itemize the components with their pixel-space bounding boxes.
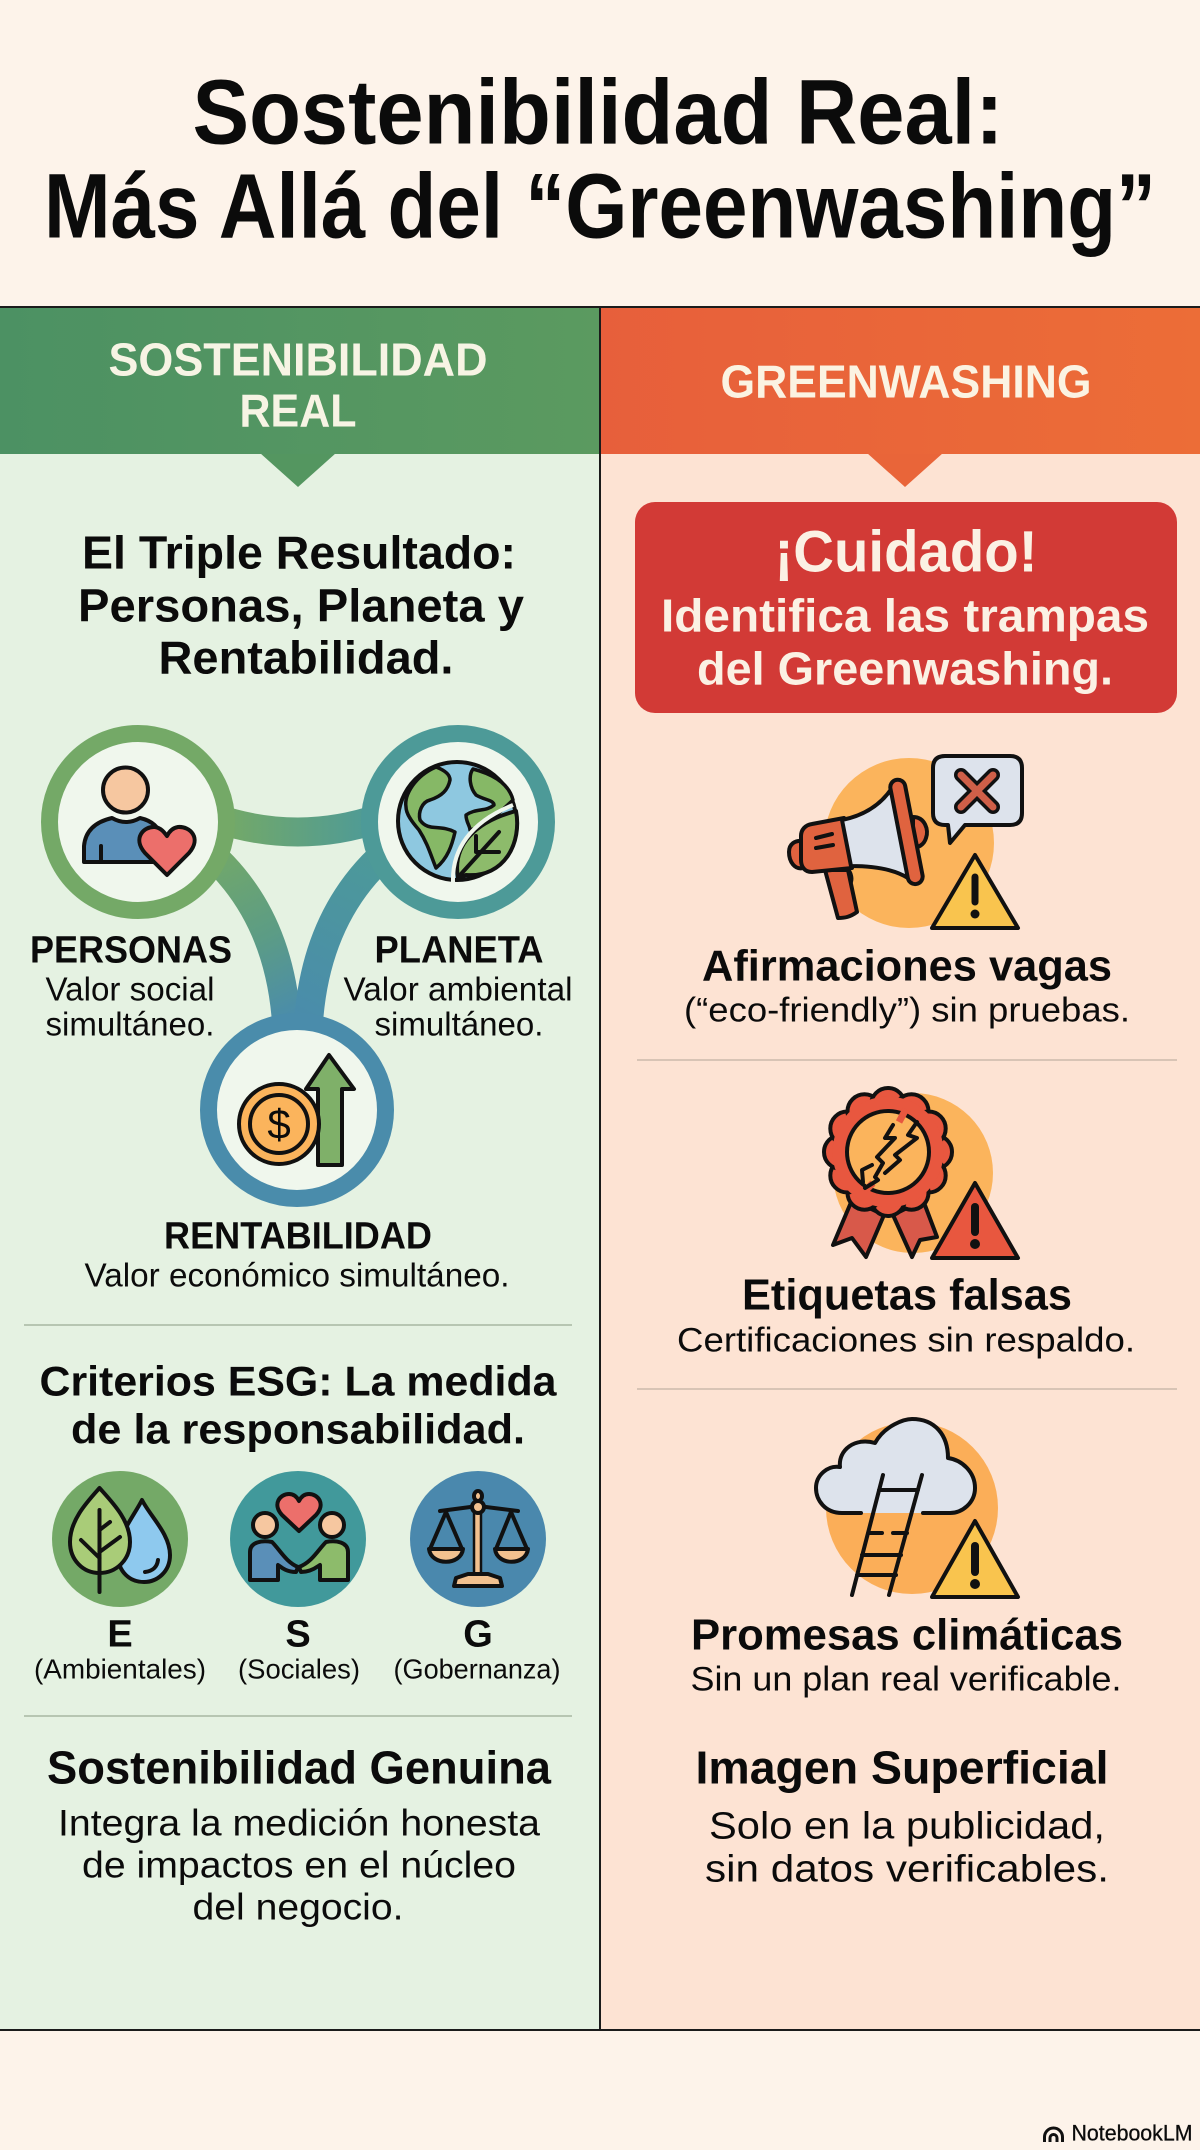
title [44,62,1156,258]
heading: criterios esg [40,1358,557,1452]
header: sostenibilidad real [0,307,600,487]
heading: criterios esg: Criterios ESG: La medida [40,1358,557,1404]
icon: cloud ladder with warning [816,1419,1018,1597]
label: rentabilidad: RENTABILIDAD [164,1216,432,1258]
text block: imagen superficial: Solo en la publicidad, [709,1806,1105,1848]
diagram: triple bottom line [30,734,572,1294]
heading: triple resultado [78,526,524,684]
esg: gobernanza: G [463,1614,493,1656]
node: planeta [370,734,546,910]
heading: triple resultado: Personas, Planeta y [78,580,524,632]
icon: false badge with warning [824,1088,1018,1258]
text block: sostenibilidad genuina: de impactos en el núcleo [82,1844,516,1886]
esg: ambientales: (Ambientales) [34,1654,206,1684]
text block: sostenibilidad genuina: del negocio. [192,1886,404,1928]
esg: gobernanza [394,1471,560,1684]
header: greenwashing [600,307,1200,487]
node: rentabilidad: $ [267,1100,291,1148]
text: promesas climaticas: Promesas climáticas [691,1610,1123,1660]
callout: cuidado: Identifica las trampas [661,590,1149,642]
esg: ambientales [34,1471,206,1684]
title: Sostenibilidad Real: [192,62,1004,164]
text: afirmaciones vagas: (“eco-friendly”) sin pruebas. [684,992,1130,1030]
esg: ambientales: E [107,1614,133,1656]
panel: greenwashing [600,307,1200,2030]
footer: notebooklm mark: NotebookLM [1072,2120,1192,2146]
icon: megaphone with warning [789,756,1022,928]
heading: criterios esg: de la responsabilidad. [71,1406,525,1452]
label: personas: simultáneo. [46,1006,214,1042]
text: etiquetas falsas [677,1270,1135,1360]
node: rentabilidad [208,1022,386,1198]
label: personas [30,930,232,1042]
callout: cuidado [635,502,1177,713]
callout: cuidado: ¡Cuidado! [774,520,1038,584]
label: rentabilidad: Valor económico simultáneo. [84,1256,510,1294]
text: afirmaciones vagas: Afirmaciones vagas [702,942,1112,990]
text: afirmaciones vagas [684,942,1130,1030]
header: greenwashing: GREENWASHING [720,356,1092,408]
heading: triple resultado: El Triple Resultado: [82,526,516,578]
text block: imagen superficial: Imagen Superficial [696,1742,1108,1794]
text: promesas climaticas: Sin un plan real verificable. [690,1660,1122,1698]
text block: imagen superficial [696,1742,1109,1890]
text block: sostenibilidad genuina: Integra la medición honesta [58,1802,540,1844]
connectors [200,818,395,1030]
text block: sostenibilidad genuina: Sostenibilidad Genuina [47,1742,551,1794]
header: sostenibilidad real: REAL [240,384,356,436]
label: planeta: Valor ambiental [344,970,572,1008]
panel: sostenibilidad real [0,307,600,2030]
panel background peach [600,307,1200,2030]
header: sostenibilidad real: SOSTENIBILIDAD [108,334,488,386]
node: personas [50,734,226,910]
label: planeta: PLANETA [374,930,544,972]
esg: gobernanza: (Gobernanza) [394,1654,560,1684]
callout: cuidado: del Greenwashing. [697,642,1113,694]
label: planeta [344,930,572,1042]
text block: imagen superficial: sin datos verificables. [705,1848,1109,1890]
heading: triple resultado: Rentabilidad. [158,632,454,684]
label: rentabilidad [84,1216,510,1294]
esg: sociales [230,1471,366,1684]
esg: sociales: S [285,1614,311,1656]
text block: sostenibilidad genuina [47,1742,551,1928]
label: planeta: simultáneo. [374,1006,544,1042]
text: promesas climaticas [690,1610,1123,1698]
text: etiquetas falsas: Etiquetas falsas [742,1270,1072,1320]
label: personas: PERSONAS [30,930,232,972]
label: personas: Valor social [46,970,215,1008]
text: etiquetas falsas: Certificaciones sin respaldo. [677,1322,1135,1360]
esg: sociales: (Sociales) [238,1654,360,1684]
panel background green [0,307,600,2030]
